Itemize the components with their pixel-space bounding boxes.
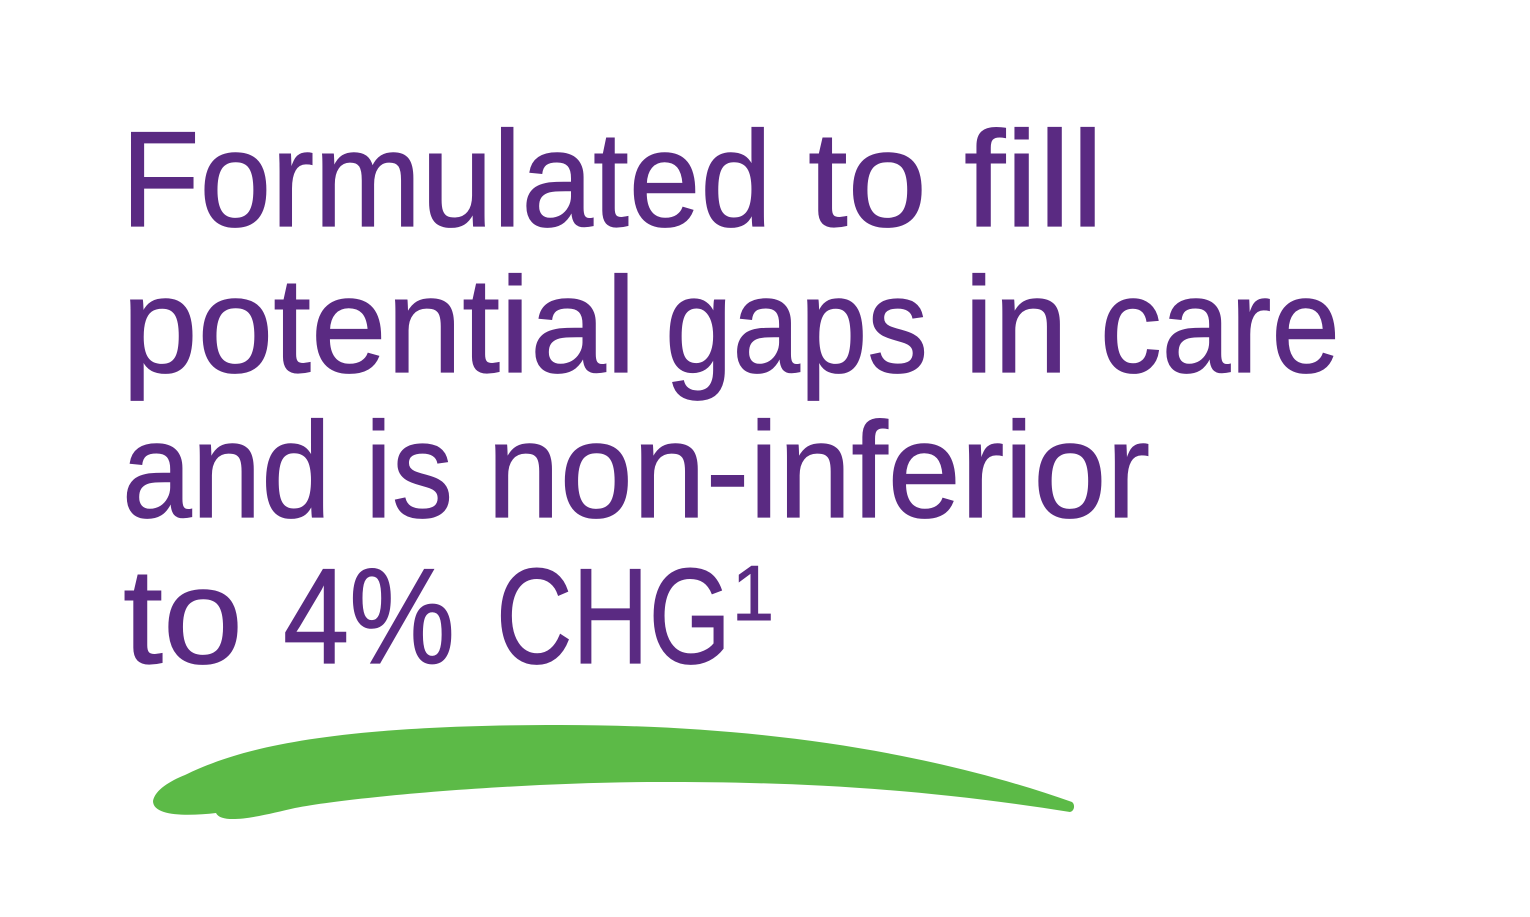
title: is xyxy=(365,394,453,546)
title xyxy=(121,103,1340,692)
title: Formulated xyxy=(121,103,772,255)
title: care xyxy=(1100,249,1340,401)
title: fill xyxy=(964,103,1104,255)
title: to xyxy=(808,103,927,255)
title: and xyxy=(122,394,331,546)
title: potential xyxy=(122,249,636,401)
title: non-inferior xyxy=(487,394,1150,546)
title: in xyxy=(964,249,1068,401)
title: to xyxy=(123,540,243,692)
green brush swoosh xyxy=(153,725,1074,819)
title: CHG xyxy=(496,540,731,692)
title: 1 xyxy=(732,549,774,637)
title: gaps xyxy=(665,249,928,401)
title: 4% xyxy=(283,540,455,692)
